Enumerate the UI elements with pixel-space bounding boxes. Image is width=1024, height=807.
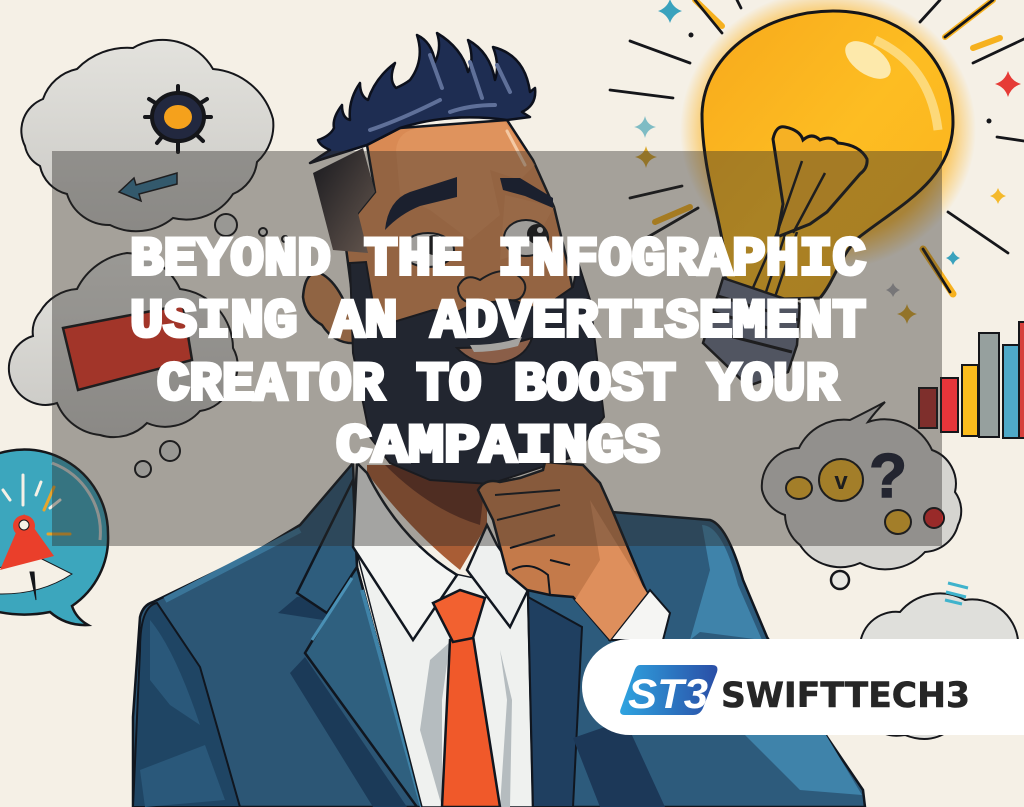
mouth [457, 338, 532, 364]
hand shading [575, 500, 647, 640]
icon: check letter: v [834, 468, 848, 495]
translucent grey title panel [52, 151, 942, 546]
shirt cuff [610, 590, 670, 640]
nose [458, 271, 525, 304]
bulb filament [773, 127, 867, 237]
shirt shadows [420, 642, 512, 807]
lapel shadows [278, 590, 407, 807]
thought cloud: decision [762, 402, 961, 569]
man: hair [310, 33, 535, 163]
left sleeve [133, 603, 240, 807]
light rays [610, 0, 1024, 294]
title: CREATOR TO BOOST YOUR [157, 355, 839, 416]
thought cloud: top left [21, 40, 273, 231]
title: CAMPAINGS [336, 417, 660, 478]
logo pill [582, 639, 1024, 735]
jacket right body [528, 512, 865, 807]
icon: arrow [119, 173, 177, 201]
speech bubble gauge [0, 450, 108, 625]
icon: gold coins [786, 459, 944, 534]
gauge dial [0, 558, 72, 594]
finger creases [495, 490, 570, 595]
bulb highlight [839, 34, 897, 86]
title [130, 230, 866, 478]
icon: question mark: ? [869, 442, 907, 511]
bulb screw base [703, 278, 800, 386]
sleeve highlights [690, 525, 862, 795]
light bulb [702, 11, 953, 386]
thought cloud: red card [9, 253, 238, 437]
logo mark [620, 665, 717, 715]
hair highlights [370, 55, 510, 130]
hand shape [478, 462, 647, 640]
small thought bubble [831, 571, 849, 589]
shoulder highlight [165, 530, 300, 600]
man: beard [350, 262, 604, 484]
man: suit jacket [133, 463, 865, 807]
title: USING AN ADVERTISEMENT [130, 292, 866, 353]
man: head [313, 120, 590, 470]
thought bubbles: top left [135, 214, 288, 477]
icon: red card [63, 305, 192, 390]
face shading [396, 122, 554, 260]
eyebrows [385, 177, 553, 230]
thought cloud: bottom right [860, 583, 1018, 739]
eyes [402, 220, 548, 267]
neck [367, 465, 487, 570]
upper lapel [297, 480, 357, 613]
red tie [433, 590, 500, 807]
man: ear [303, 273, 357, 343]
logo letters: ST3 [628, 670, 708, 717]
man: hand [478, 462, 670, 640]
right collar [467, 525, 528, 627]
jacket left body [133, 463, 422, 807]
bar chart [919, 322, 1024, 438]
sparkles [634, 0, 1021, 324]
white shirt [357, 553, 533, 807]
jacket dark panel [528, 597, 582, 807]
lower lapel [305, 567, 422, 807]
title: BEYOND THE INFOGRAPHIC [130, 230, 866, 291]
icon: gear sun [145, 86, 211, 152]
shaved side of head [313, 148, 375, 253]
brand name: SWIFTTECH3 [721, 676, 970, 716]
light bulb glow [680, 0, 976, 270]
left collar [353, 463, 457, 640]
